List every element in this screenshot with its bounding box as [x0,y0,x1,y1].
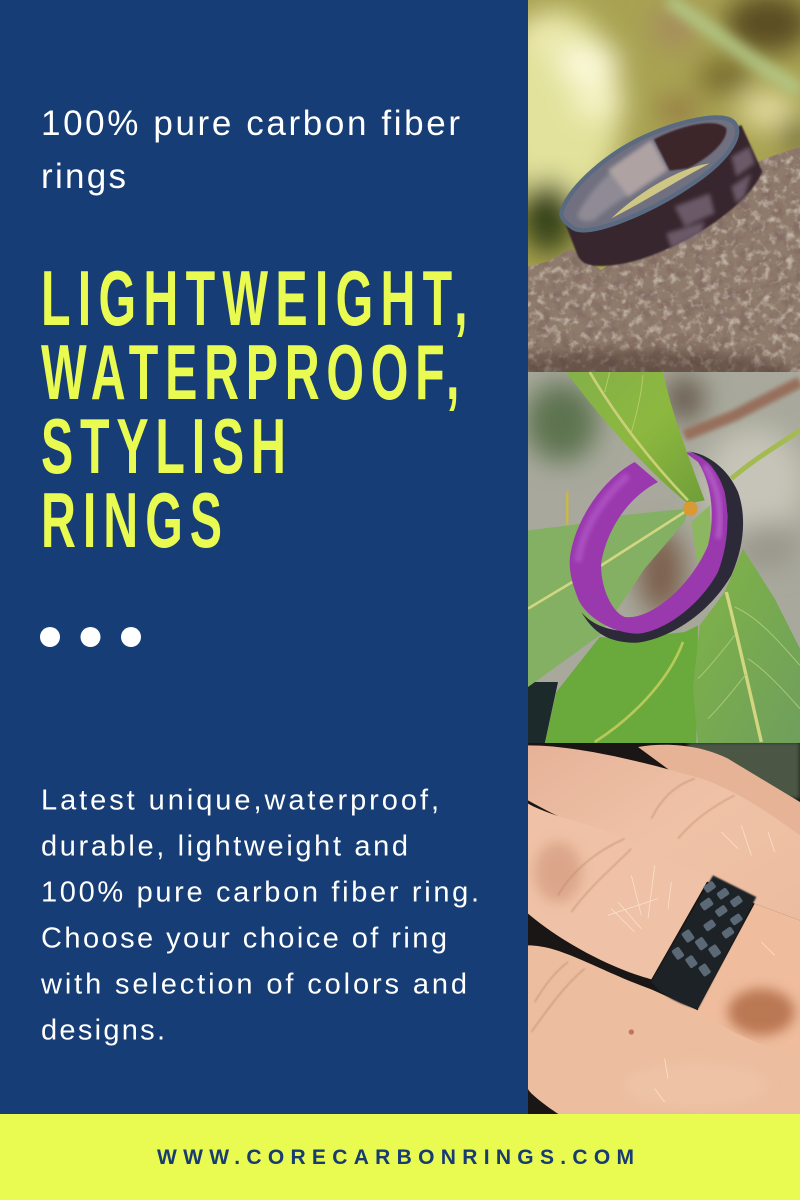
intro text: rings [41,157,126,196]
body text: Latest unique,waterproof, [41,784,439,816]
rock [528,147,800,373]
body text [40,784,479,1046]
heading: STYLISH [41,402,286,490]
middle finger [528,804,710,979]
body text: durable, lightweight and [41,830,408,862]
website url: WWW.CORECARBONRINGS.COM [157,1146,634,1169]
lower left dark corner [528,682,558,744]
upper finger [528,745,800,920]
ring [561,117,762,266]
photo: ring on finger [528,742,800,1116]
heading: RINGS [41,476,222,564]
leaf: front top [566,372,705,504]
panel: blue background [0,0,528,1114]
leaf: left [528,509,688,687]
lower finger [528,945,800,1116]
leaf: bottom [545,625,698,744]
intro text [41,104,460,196]
ring [651,875,756,1009]
body text: 100% pure carbon fiber ring. [41,876,479,908]
intro text: 100% pure carbon fiber [41,104,460,143]
body text: designs. [41,1014,165,1046]
leaf: right [693,549,800,744]
heading: LIGHTWEIGHT, [41,254,468,342]
heading [41,254,468,564]
footer band [0,1114,800,1200]
body text: with selection of colors and [40,968,467,1000]
body text: Choose your choice of ring [41,922,447,954]
photo: black ring on rock [528,0,800,372]
back finger [638,744,800,836]
ring [570,451,743,643]
three dots [40,627,141,647]
photo: purple ring on leaves [525,372,800,744]
right of ring [698,904,800,1054]
heading: WATERPROOF, [41,328,460,416]
stem [731,430,800,479]
